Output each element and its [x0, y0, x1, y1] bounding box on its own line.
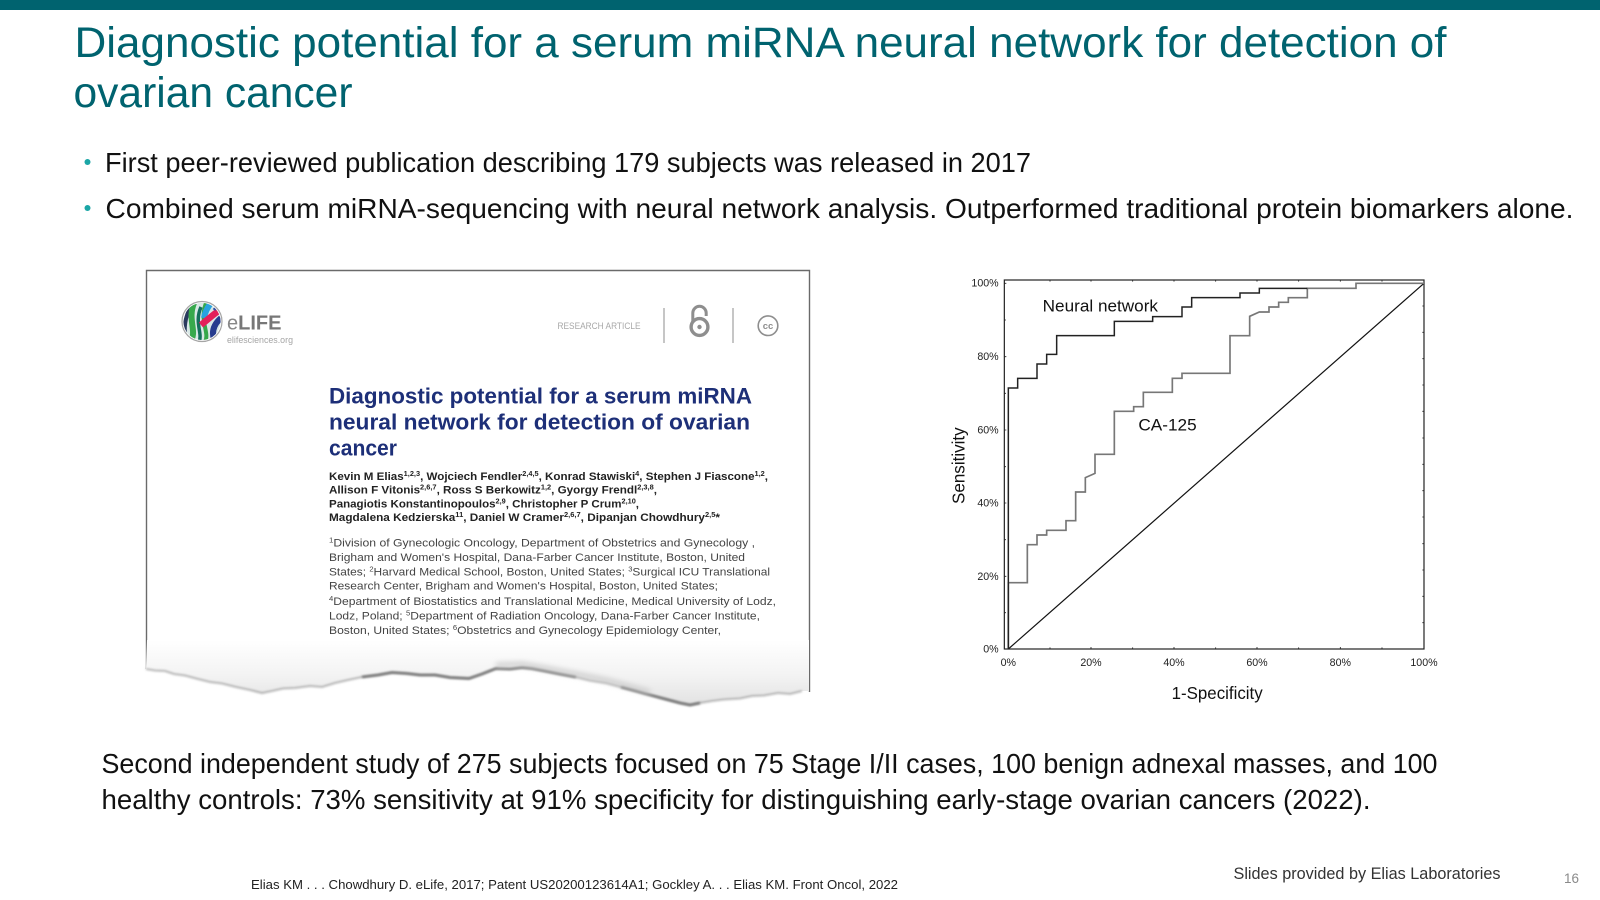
y axis labels	[971, 278, 999, 656]
paper affiliations: Department of Radiation Oncology, Dana-Farber Cancer Institute,	[410, 611, 760, 623]
second study text	[102, 748, 1438, 815]
x axis labels: 40%	[1163, 657, 1185, 669]
paper authors: , Daniel W Cramer	[463, 512, 565, 524]
series label: neural network: Neural network	[1043, 297, 1159, 316]
paper affiliations: Brigham and Women's Hospital, Dana-Farber Cancer Institute, Boston, United	[329, 552, 745, 564]
diagonal reference line	[1008, 283, 1424, 649]
paper affiliations: Obstetrics and Gynecology Epidemiology Center,	[457, 625, 721, 637]
paper affiliations: Department of Biostatistics and Translational Medicine, Medical University of Lodz,	[333, 596, 776, 608]
paper affiliations: States;	[329, 566, 363, 578]
paper authors: 2,5	[705, 512, 716, 519]
paper affiliations: 2	[369, 566, 374, 573]
paper authors: 2,6,7	[564, 512, 581, 519]
paper authors: , Gyorgy Frendl	[551, 484, 637, 496]
title: Diagnostic potential for a serum miRNA neural network for detection of	[74, 19, 1448, 67]
paper authors: 11	[455, 512, 463, 519]
icon: creative commons	[733, 308, 778, 343]
x axis labels: 100%	[1410, 657, 1438, 669]
eLife wordmark: elifesciences.org	[227, 335, 293, 346]
page number: 16	[1564, 870, 1579, 886]
bullet list: First peer-reviewed publication describing 179 subjects was released in 2017	[105, 147, 1031, 178]
x axis labels	[1001, 657, 1438, 669]
title	[74, 19, 1448, 117]
eLife wordmark	[227, 312, 293, 346]
icon: open access	[664, 306, 708, 343]
paper authors: Magdalena Kedzierska	[329, 512, 447, 524]
series label: CA-125: CA-125	[1138, 416, 1197, 435]
x axis labels: 20%	[1080, 657, 1102, 669]
paper authors: 1,2	[541, 484, 551, 492]
paper authors: ,	[765, 471, 768, 483]
y axis labels: 100%	[971, 278, 999, 290]
y axis labels: 20%	[977, 571, 999, 583]
paper authors: Allison F Vitonis	[329, 484, 415, 496]
paper authors: 2,10	[622, 498, 636, 506]
paper authors: 4	[635, 471, 639, 478]
x axis labels: 60%	[1246, 657, 1268, 669]
title: ovarian cancer	[74, 69, 352, 117]
paper heading	[329, 384, 752, 460]
second study text: healthy controls: 73% sensitivity at 91% specificity for distinguishing early-stage ovarian cancers (2022).	[102, 784, 1370, 815]
paper authors: , Ross S Berkowitz	[437, 484, 541, 496]
paper outline	[146, 270, 810, 692]
paper authors: 1,2,3	[404, 471, 420, 478]
chart: ROC curves	[949, 278, 1438, 703]
citation: Elias KM . . . Chowdhury D. eLife, 2017; Patent US20200123614A1; Gockley A. . . Elias KM. Front Oncol, 2022	[251, 877, 898, 892]
plot frame and ticks	[1004, 280, 1424, 649]
paper affiliations: 4	[329, 596, 333, 603]
paper authors: Panagiotis Konstantinopoulos	[329, 498, 488, 510]
paper authors: , Christopher P Crum	[506, 498, 622, 510]
x axis labels: 80%	[1330, 657, 1352, 669]
paper authors: , Konrad Stawiski	[539, 471, 635, 483]
y axis labels: 0%	[983, 644, 999, 656]
paper authors: , Dipanjan Chowdhury	[581, 512, 706, 524]
bullet list	[84, 147, 1574, 224]
paper authors: 2,3,8	[637, 484, 654, 492]
research article label: RESEARCH ARTICLE	[558, 321, 640, 332]
paper authors: 2,6,7	[420, 484, 437, 492]
paper authors: 2,4,5	[522, 471, 539, 478]
source credit: Slides provided by Elias Laboratories	[1234, 864, 1500, 883]
icon: creative commons: cc	[763, 321, 773, 332]
paper authors: 2,9	[496, 498, 506, 506]
paper affiliations: Research Center, Brigham and Women's Hospital, Boston, United States;	[329, 580, 718, 592]
x axis title: 1-Specificity	[1172, 683, 1263, 703]
eLife wordmark: eLIFE	[227, 312, 281, 334]
paper affiliations: Harvard Medical School, Boston, United States;	[374, 566, 628, 578]
panel: eLife paper excerpt	[146, 270, 810, 705]
paper affiliations: 5	[406, 611, 410, 618]
paper affiliations: Division of Gynecologic Oncology, Department of Obstetrics and Gynecology ,	[333, 538, 755, 550]
paper affiliations: 3	[628, 566, 633, 573]
paper authors: , Stephen J Fiascone	[639, 471, 755, 483]
paper authors: 1,2	[755, 471, 765, 478]
paper affiliations: Lodz, Poland;	[329, 611, 396, 623]
second study text: Second independent study of 275 subjects focused on 75 Stage I/II cases, 100 benign adnexal masses, and 100	[102, 748, 1438, 779]
curve: CA-125	[1008, 283, 1424, 649]
paper authors: Kevin M Elias	[329, 471, 400, 483]
paper authors: ,	[636, 498, 639, 510]
paper affiliations: 1	[329, 538, 333, 544]
paper heading: cancer	[329, 436, 397, 460]
paper affiliations: Boston, United States;	[329, 625, 438, 637]
paper authors: , Wojciech Fendler	[420, 471, 523, 483]
top banner bar	[0, 0, 1600, 10]
paper authors	[329, 471, 768, 524]
x axis labels: 0%	[1001, 657, 1017, 669]
paper affiliations: 6	[453, 625, 457, 632]
paper affiliations: Surgical ICU Translational	[632, 566, 770, 578]
paper affiliations	[329, 538, 776, 637]
curve: neural network	[1008, 288, 1307, 649]
bullet list: Combined serum miRNA-sequencing with neural network analysis. Outperformed traditional protein biomarkers alone.	[106, 193, 1574, 224]
paper authors: *	[715, 512, 721, 524]
torn paper edge	[146, 640, 809, 705]
y axis labels: 80%	[977, 351, 999, 363]
paper heading: neural network for detection of ovarian	[329, 410, 750, 434]
y axis labels: 60%	[977, 424, 999, 436]
y axis labels: 40%	[977, 498, 999, 510]
paper authors: ,	[654, 484, 657, 496]
y axis title: Sensitivity	[949, 427, 969, 504]
icon: eLife logo	[182, 302, 222, 342]
paper heading: Diagnostic potential for a serum miRNA	[329, 384, 752, 408]
